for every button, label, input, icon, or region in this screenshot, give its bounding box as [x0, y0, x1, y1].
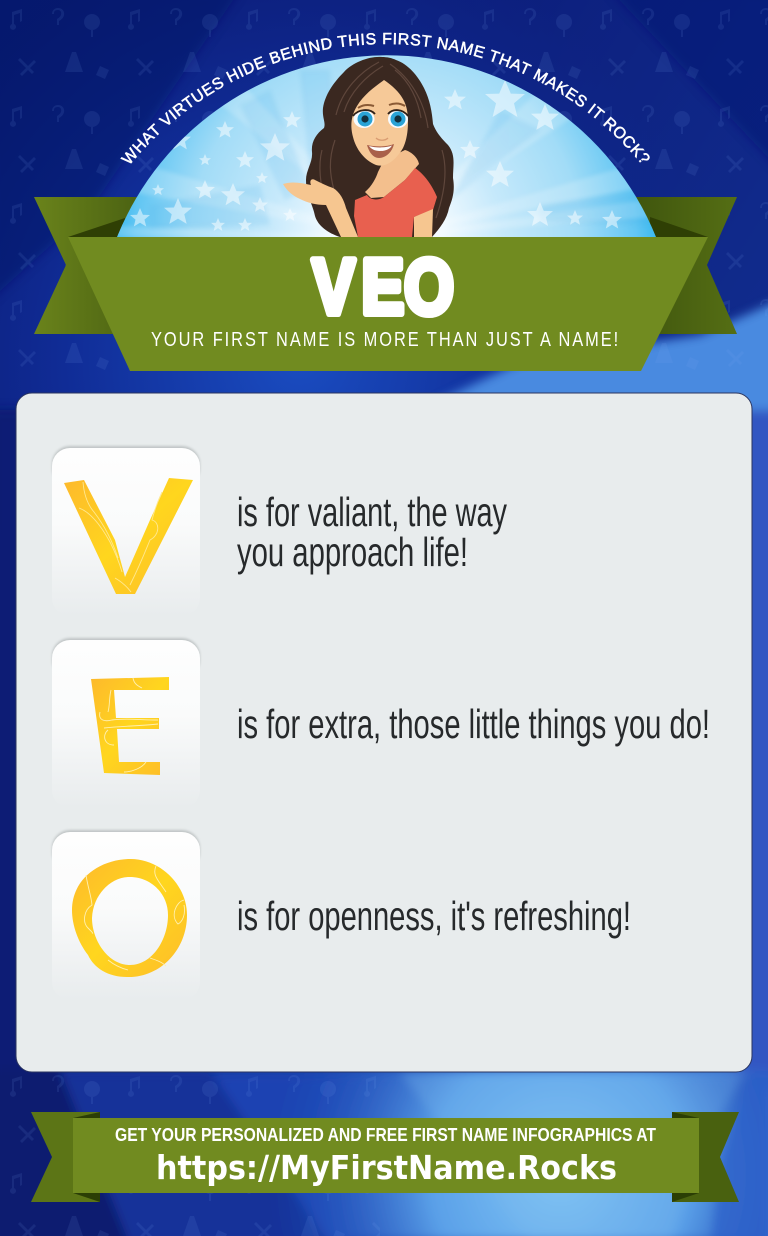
face [351, 80, 408, 166]
curved headline: WHAT VIRTUES HIDE BEHIND THIS FIRST NAME THAT MAKES IT ROCK? [120, 32, 650, 164]
letter O [72, 859, 187, 977]
left tail [31, 1112, 100, 1202]
hair [306, 57, 454, 237]
letter V [64, 478, 193, 594]
right eye [388, 110, 408, 128]
footer line: GET YOUR PERSONALIZED AND FREE FIRST NAME INFOGRAPHICS AT [115, 1124, 657, 1145]
ribbon tails [34, 197, 737, 334]
character illustration [283, 57, 454, 237]
text: V line: is for valiant, the way [237, 489, 507, 535]
left arm and hand [283, 179, 358, 237]
letter E [91, 677, 169, 775]
text: V line 2: you approach life! [237, 529, 468, 575]
left eye [353, 110, 375, 128]
card: O [52, 830, 200, 1000]
sunburst dome [100, 55, 680, 237]
folds [73, 1112, 699, 1202]
mouth [367, 144, 394, 158]
tagline: YOUR FIRST NAME IS MORE THAN JUST A NAME! [151, 327, 618, 350]
main ribbon [68, 237, 708, 371]
eyebrows [358, 104, 405, 108]
card: V [52, 446, 200, 616]
right tail [632, 197, 737, 334]
right tail [672, 1112, 739, 1202]
shirt [354, 168, 437, 237]
ribbon front [73, 1118, 699, 1193]
name: VEO [312, 244, 454, 331]
left fold [68, 218, 125, 237]
card: E [52, 638, 200, 808]
footer url: https://MyFirstName.Rocks [156, 1148, 617, 1187]
footer ribbon [31, 1112, 739, 1202]
neck and chest [365, 150, 419, 198]
content panel [16, 393, 752, 1072]
ribbon front [68, 237, 708, 371]
right fold [650, 217, 708, 237]
right arm [414, 209, 433, 237]
left tail [34, 197, 140, 334]
nose [376, 138, 388, 140]
